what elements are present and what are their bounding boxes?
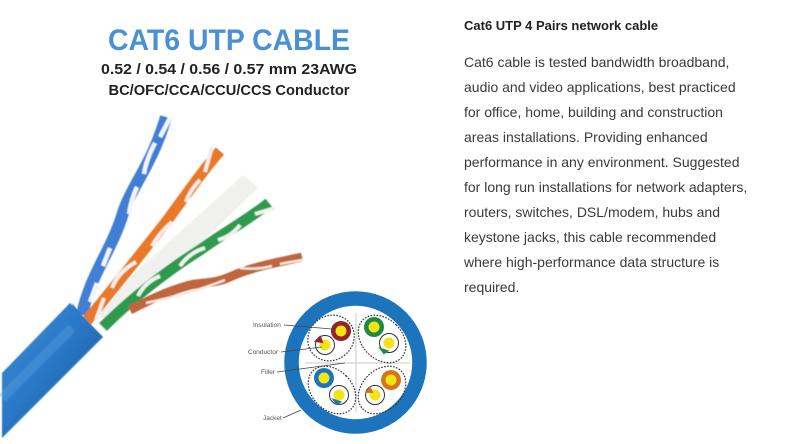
- cross-section diagram: [248, 298, 420, 426]
- white filler: [90, 175, 258, 323]
- subtitle: conductor: BC/OFC/CCA/CCU/CCS Conductor: [108, 83, 350, 99]
- label: conductor: Conductor: [248, 349, 279, 356]
- bottom right pair: [366, 370, 401, 404]
- brown pair: [130, 257, 303, 310]
- top right pair: [364, 317, 398, 353]
- product description: audio and video applications, best practiced: [464, 79, 736, 95]
- cable jacket: [2, 303, 103, 438]
- label: filler: Filler: [261, 369, 276, 376]
- label: insulation: Insulation: [253, 322, 281, 329]
- jacket ring: [292, 298, 420, 426]
- label: insulation: [253, 322, 332, 329]
- product description: routers, switches, DSL/modem, hubs and: [464, 204, 720, 220]
- product description: required.: [464, 279, 519, 295]
- top left pair: [316, 321, 351, 354]
- label: jacket: Jacket: [263, 415, 282, 422]
- product description: for office, home, building and construction: [464, 104, 723, 120]
- inner cable opening: [72, 303, 103, 337]
- filler cross: [305, 313, 410, 412]
- subtitle: gauge: 0.52 / 0.54 / 0.56 / 0.57 mm 23AWG: [101, 62, 357, 78]
- product description: for long run installations for network adapters,: [464, 179, 747, 195]
- title: CAT6 UTP CABLE: [108, 24, 350, 57]
- pair boundaries: [298, 306, 415, 423]
- product description: performance in any environment. Suggested: [464, 154, 740, 170]
- green pair: [103, 203, 275, 327]
- product description: keystone jacks, this cable recommended: [464, 229, 716, 245]
- orange pair: [86, 147, 220, 322]
- product description: [464, 54, 747, 295]
- product description: Cat6 cable is tested bandwidth broadband,: [464, 54, 729, 70]
- label: conductor: [248, 347, 322, 356]
- cable photo illustration: [2, 117, 303, 438]
- product heading: Cat6 UTP 4 Pairs network cable: [464, 18, 658, 33]
- bottom left pair: [314, 368, 348, 404]
- label: filler: [261, 363, 345, 376]
- product description: where high-performance data structure is: [464, 254, 719, 270]
- blue pair: [82, 117, 170, 315]
- product description: areas installations. Providing enhanced: [464, 129, 708, 145]
- label: jacket: [263, 410, 301, 422]
